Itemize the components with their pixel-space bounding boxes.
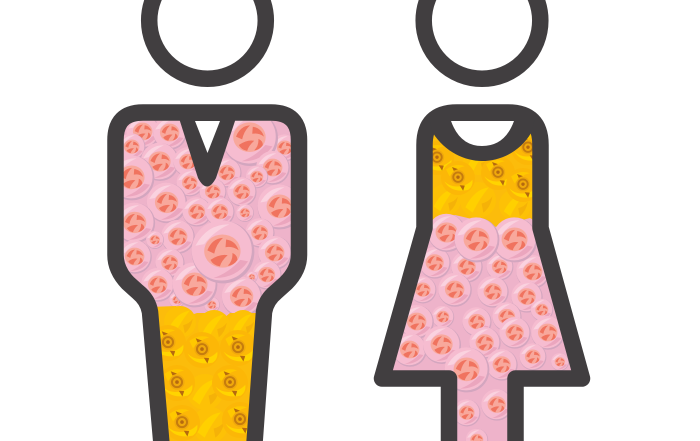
infographic: man and woman pictograms filled with roses bbox=[107, 0, 590, 441]
man V neck bbox=[178, 115, 237, 186]
man yellow rose legs bbox=[157, 306, 256, 441]
woman dress outline bbox=[382, 112, 582, 441]
man head ring bbox=[149, 0, 266, 79]
woman yellow rose bodice bbox=[432, 134, 532, 227]
woman figure bbox=[370, 0, 595, 441]
woman head ring bbox=[424, 0, 540, 79]
man figure bbox=[100, 0, 310, 441]
man rose fill bbox=[124, 120, 291, 441]
man body outline bbox=[116, 112, 299, 441]
woman rose fill bbox=[393, 133, 571, 441]
woman neckline bbox=[428, 115, 536, 161]
